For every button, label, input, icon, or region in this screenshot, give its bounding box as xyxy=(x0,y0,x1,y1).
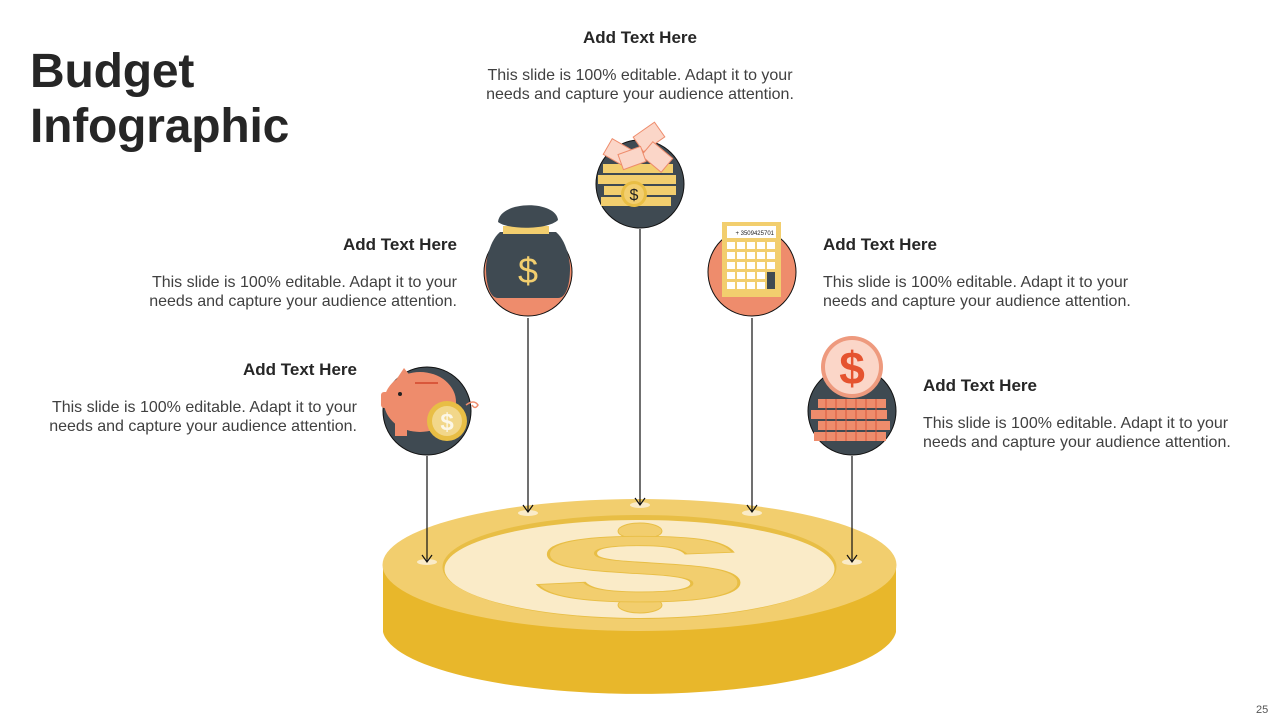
text block: right upper: This slide is 100% editable. Adapt it to your xyxy=(823,274,1128,291)
text block: right upper: Add Text Here xyxy=(823,235,937,254)
icon: money bag: $ xyxy=(518,250,538,291)
text block: right upper xyxy=(823,235,1131,310)
text block: left lower: needs and capture your audience attention. xyxy=(49,418,357,435)
text block: left upper: needs and capture your audience attention. xyxy=(149,293,457,310)
icon: cash pile xyxy=(596,122,684,228)
icon: cash pile: $ xyxy=(630,187,639,204)
text block: left lower: Add Text Here xyxy=(243,360,357,379)
coin base xyxy=(382,499,896,694)
text block: left upper: Add Text Here xyxy=(343,235,457,254)
text block: right lower xyxy=(923,376,1231,451)
text block: right lower: Add Text Here xyxy=(923,376,1037,395)
text block: left lower: This slide is 100% editable. Adapt it to your xyxy=(52,399,357,416)
text block: left upper xyxy=(149,235,457,310)
text block: right lower: needs and capture your audience attention. xyxy=(923,434,1231,451)
text block: right upper: needs and capture your audience attention. xyxy=(823,293,1131,310)
icon: coin stack: $ xyxy=(839,342,865,394)
icon: piggy bank: $ xyxy=(440,409,454,436)
icon: coin stack xyxy=(808,336,896,455)
icon: money bag xyxy=(484,205,572,316)
text block: left lower xyxy=(49,360,357,435)
text block: left upper: This slide is 100% editable. Adapt it to your xyxy=(152,274,457,291)
coin base: S xyxy=(528,517,752,621)
title xyxy=(30,45,289,153)
arrows xyxy=(427,229,852,562)
icon: calculator xyxy=(708,222,796,316)
text block: top xyxy=(486,28,794,103)
text block: top: needs and capture your audience attention. xyxy=(486,86,794,103)
icon: piggy bank xyxy=(381,367,478,455)
page number: 25 xyxy=(1256,704,1268,716)
text block: right lower: This slide is 100% editable. Adapt it to your xyxy=(923,415,1228,432)
text block: top: Add Text Here xyxy=(583,28,697,47)
title: Budget xyxy=(30,45,194,98)
text block: top: This slide is 100% editable. Adapt it to your xyxy=(487,67,793,84)
title: Infographic xyxy=(30,100,289,153)
icon: calculator: + 3509425701 xyxy=(735,231,775,237)
